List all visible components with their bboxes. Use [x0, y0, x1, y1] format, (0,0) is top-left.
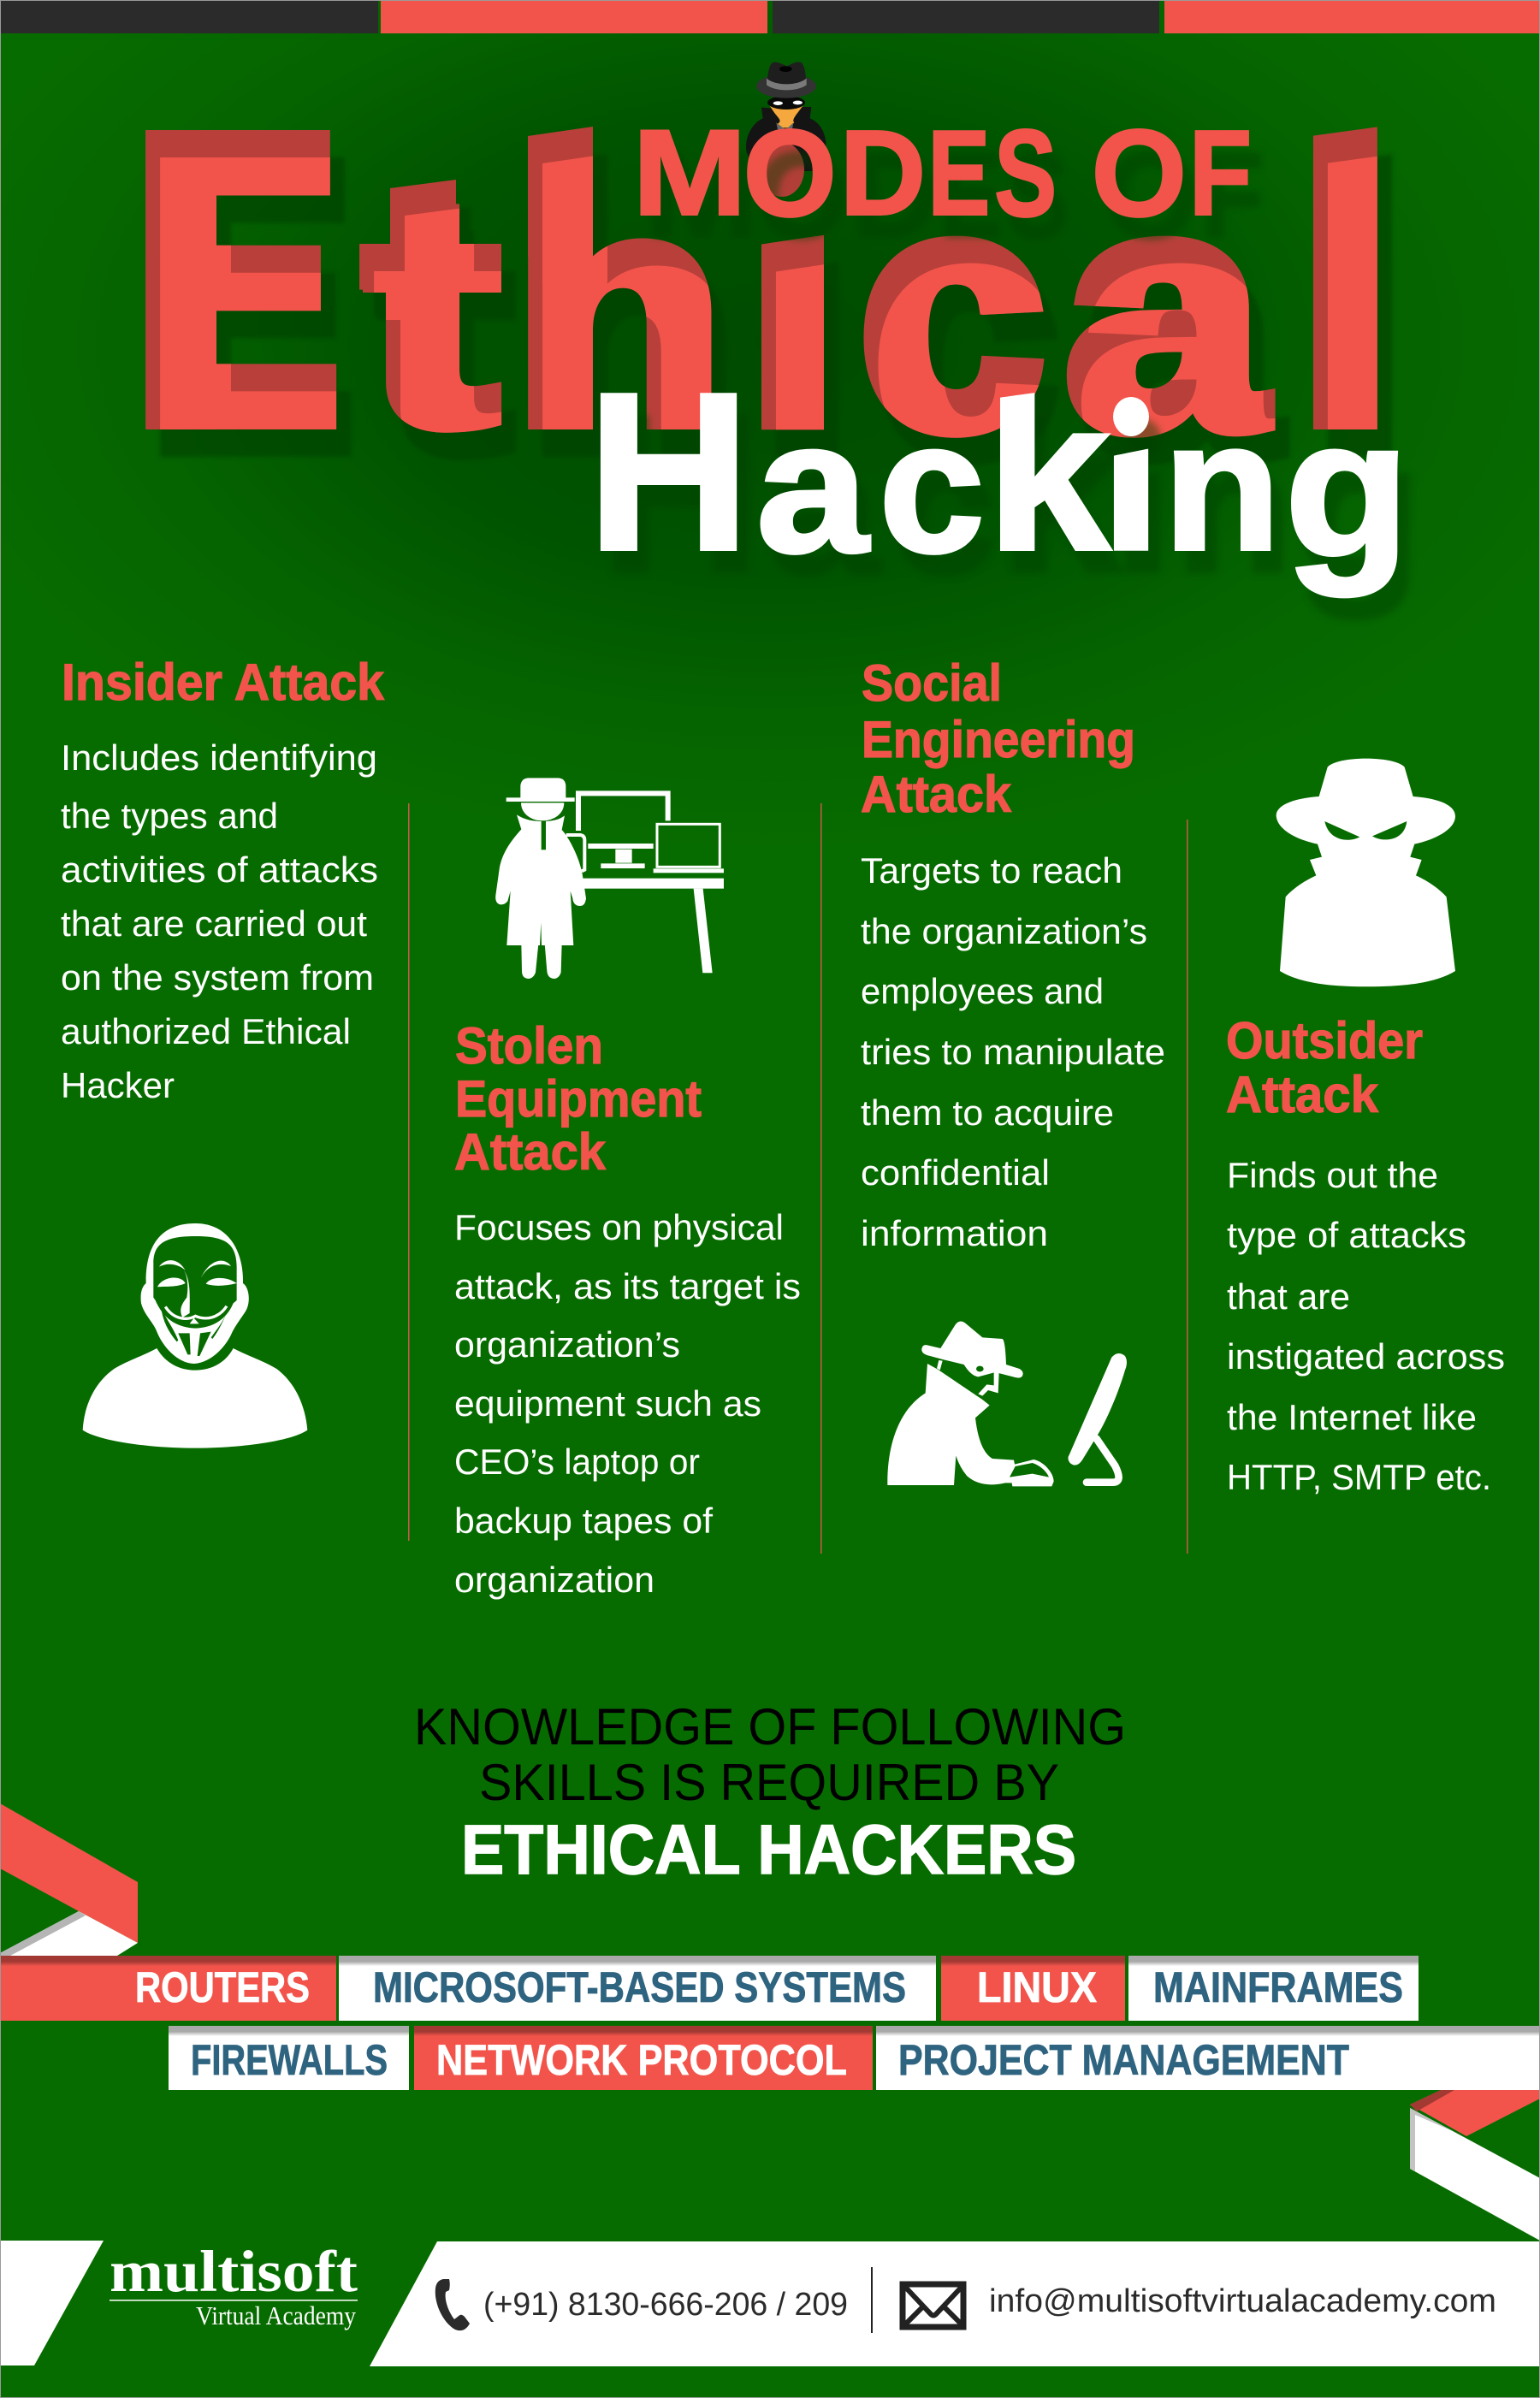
title word: Ethical: E	[133, 52, 341, 506]
text: social engineering description: employees and	[861, 971, 1104, 1011]
icon: hacker at computer	[887, 1322, 1127, 1486]
panel: outsider attack	[1226, 759, 1505, 1497]
skill tag: routers: ROUTERS	[135, 1963, 310, 2011]
logo rule and tagline: Virtual Academy	[196, 2300, 356, 2330]
title words: Modes of: S	[994, 104, 1057, 243]
heading: outsider attack: Outsider	[1226, 1012, 1423, 1069]
text: social engineering description: Targets to reach	[861, 850, 1122, 891]
title words: Modes of	[632, 104, 1252, 243]
heading: skills required	[414, 1698, 1126, 1889]
title word: Ethical	[145, 127, 1393, 465]
skill tag: microsoft-based systems: MICROSOFT-BASED SYSTEMS	[373, 1963, 906, 2011]
text: outsider attack description: the Internet like	[1227, 1397, 1477, 1437]
top colour bar	[0, 0, 1540, 33]
divider	[408, 803, 409, 1541]
text: social engineering description: confidential	[861, 1152, 1050, 1193]
heading: insider attack: Insider Attack	[62, 654, 385, 711]
heading: stolen equipment attack	[454, 1017, 702, 1181]
title word: Ethical: i	[746, 104, 839, 495]
title word: Ethical: l	[1298, 67, 1393, 504]
skill tag: mainframes: MAINFRAMES	[1153, 1963, 1403, 2011]
title word: Ethical: t	[364, 131, 496, 490]
text: insider attack description: the types and	[61, 796, 278, 836]
panel: social engineering attack	[861, 654, 1165, 1486]
divider	[1187, 820, 1188, 1554]
heading: stolen equipment attack: Attack	[454, 1123, 607, 1181]
ribbon: right fold	[1410, 2090, 1540, 2241]
icon: shadow inside title O	[760, 142, 804, 197]
text: stolen equipment description: backup tapes of	[454, 1501, 713, 1541]
title words: Modes of: O	[1092, 105, 1187, 242]
icon: envelope	[903, 2284, 963, 2327]
text: insider attack description: Includes identifying	[61, 737, 377, 778]
heading: social engineering attack: Engineering	[862, 711, 1135, 768]
title words: Modes of: D	[840, 105, 926, 240]
heading: skills required: SKILLS IS REQUIRED BY	[479, 1754, 1059, 1811]
text: social engineering description: them to acquire	[861, 1092, 1114, 1133]
title word: Hacking: n	[1164, 383, 1281, 589]
text: outsider attack description: HTTP, SMTP etc.	[1227, 1457, 1491, 1497]
title word: Ethical: h	[512, 128, 724, 491]
title word: Ethical: c	[859, 121, 1045, 499]
title word: Hacking: g	[1285, 380, 1410, 597]
icon: anonymous mask figure	[83, 1223, 307, 1448]
text: insider attack description	[61, 737, 378, 1105]
heading: social engineering attack	[861, 654, 1135, 823]
text: stolen equipment description: organization	[454, 1560, 654, 1600]
title word: Hacking: c	[879, 382, 985, 591]
text: outsider attack description: instigated across	[1227, 1336, 1505, 1377]
skill tag: routers	[0, 1956, 336, 2021]
text: insider attack description: Hacker	[61, 1065, 175, 1105]
skill tag: network protocol: NETWORK PROTOCOL	[436, 2036, 847, 2084]
text: social engineering description: the organization’s	[861, 911, 1147, 951]
heading: social engineering attack: Social	[862, 654, 1002, 712]
title word: Hacking: i	[1101, 371, 1162, 591]
text: social engineering description: information	[861, 1213, 1048, 1253]
text: stolen equipment description: equipment such as	[454, 1383, 761, 1424]
title word: Hacking	[588, 347, 1410, 597]
text: stolen equipment description: attack, as its target is	[454, 1266, 801, 1306]
footer: contact band	[370, 2241, 1540, 2366]
skill tag: microsoft-based systems	[339, 1956, 936, 2021]
phone number: (+91) 8130-666-206 / 209	[483, 2287, 848, 2323]
title word: Ethical: a	[1065, 121, 1266, 499]
ribbon: left fold	[0, 1803, 138, 1956]
text: stolen equipment description: CEO’s laptop or	[454, 1442, 700, 1482]
skill tag: firewalls: FIREWALLS	[191, 2036, 388, 2084]
text: insider attack description: activities of attacks	[61, 850, 378, 890]
text: stolen equipment description: organization’s	[454, 1324, 680, 1365]
text: outsider attack description: that are	[1227, 1276, 1350, 1317]
icon: spy mascot	[746, 62, 826, 171]
heading: social engineering attack: Attack	[861, 766, 1012, 823]
heading: outsider attack: Attack	[1226, 1066, 1379, 1123]
skill tag: linux	[941, 1956, 1125, 2021]
title words: Modes of: O	[743, 104, 837, 242]
email address: info@multisoftvirtualacademy.com	[989, 2283, 1496, 2319]
skill tag: linux: LINUX	[977, 1963, 1097, 2011]
panel: insider attack	[61, 654, 385, 1448]
text: outsider attack description: type of attacks	[1227, 1215, 1466, 1255]
divider	[820, 803, 821, 1554]
skill tag: mainframes	[1128, 1956, 1419, 2021]
heading: stolen equipment attack: Equipment	[455, 1070, 702, 1128]
heading: skills required: ETHICAL HACKERS	[461, 1811, 1076, 1889]
heading: outsider attack	[1226, 1012, 1423, 1123]
title word: Hacking: a	[756, 382, 869, 592]
icon: phone	[435, 2279, 470, 2330]
text: outsider attack description: Finds out the	[1227, 1155, 1438, 1195]
panel: stolen equipment attack	[454, 778, 801, 1600]
skill tag: firewalls	[169, 2026, 409, 2090]
text: outsider attack description	[1227, 1155, 1505, 1497]
icon: masked spy	[1276, 759, 1455, 986]
divider	[871, 2267, 873, 2333]
title word: Hacking: H	[588, 347, 749, 596]
text: stolen equipment description: Focuses on physical	[454, 1207, 784, 1247]
icon: spy at desk	[495, 778, 724, 979]
text: social engineering description	[861, 850, 1165, 1253]
text: stolen equipment description	[454, 1207, 801, 1600]
skill tag: project management: PROJECT MANAGEMENT	[898, 2036, 1349, 2084]
footer: logo	[0, 2239, 358, 2365]
text: social engineering description: tries to manipulate	[861, 1032, 1165, 1072]
heading: stolen equipment attack: Stolen	[455, 1017, 603, 1075]
heading: skills required: KNOWLEDGE OF FOLLOWING	[414, 1698, 1126, 1756]
text: insider attack description: on the system from	[61, 957, 374, 998]
title word: Hacking: k	[987, 354, 1110, 595]
title words: Modes of: E	[927, 105, 990, 240]
title words: Modes of: M	[632, 105, 747, 241]
text: insider attack description: authorized Ethical	[61, 1011, 351, 1051]
skill tag: project management	[876, 2026, 1540, 2090]
text: insider attack description: that are carried out	[61, 903, 367, 944]
skill tag: network protocol	[414, 2026, 873, 2090]
title words: Modes of: F	[1189, 104, 1252, 240]
logo wordmark: multisoft	[110, 2239, 358, 2304]
